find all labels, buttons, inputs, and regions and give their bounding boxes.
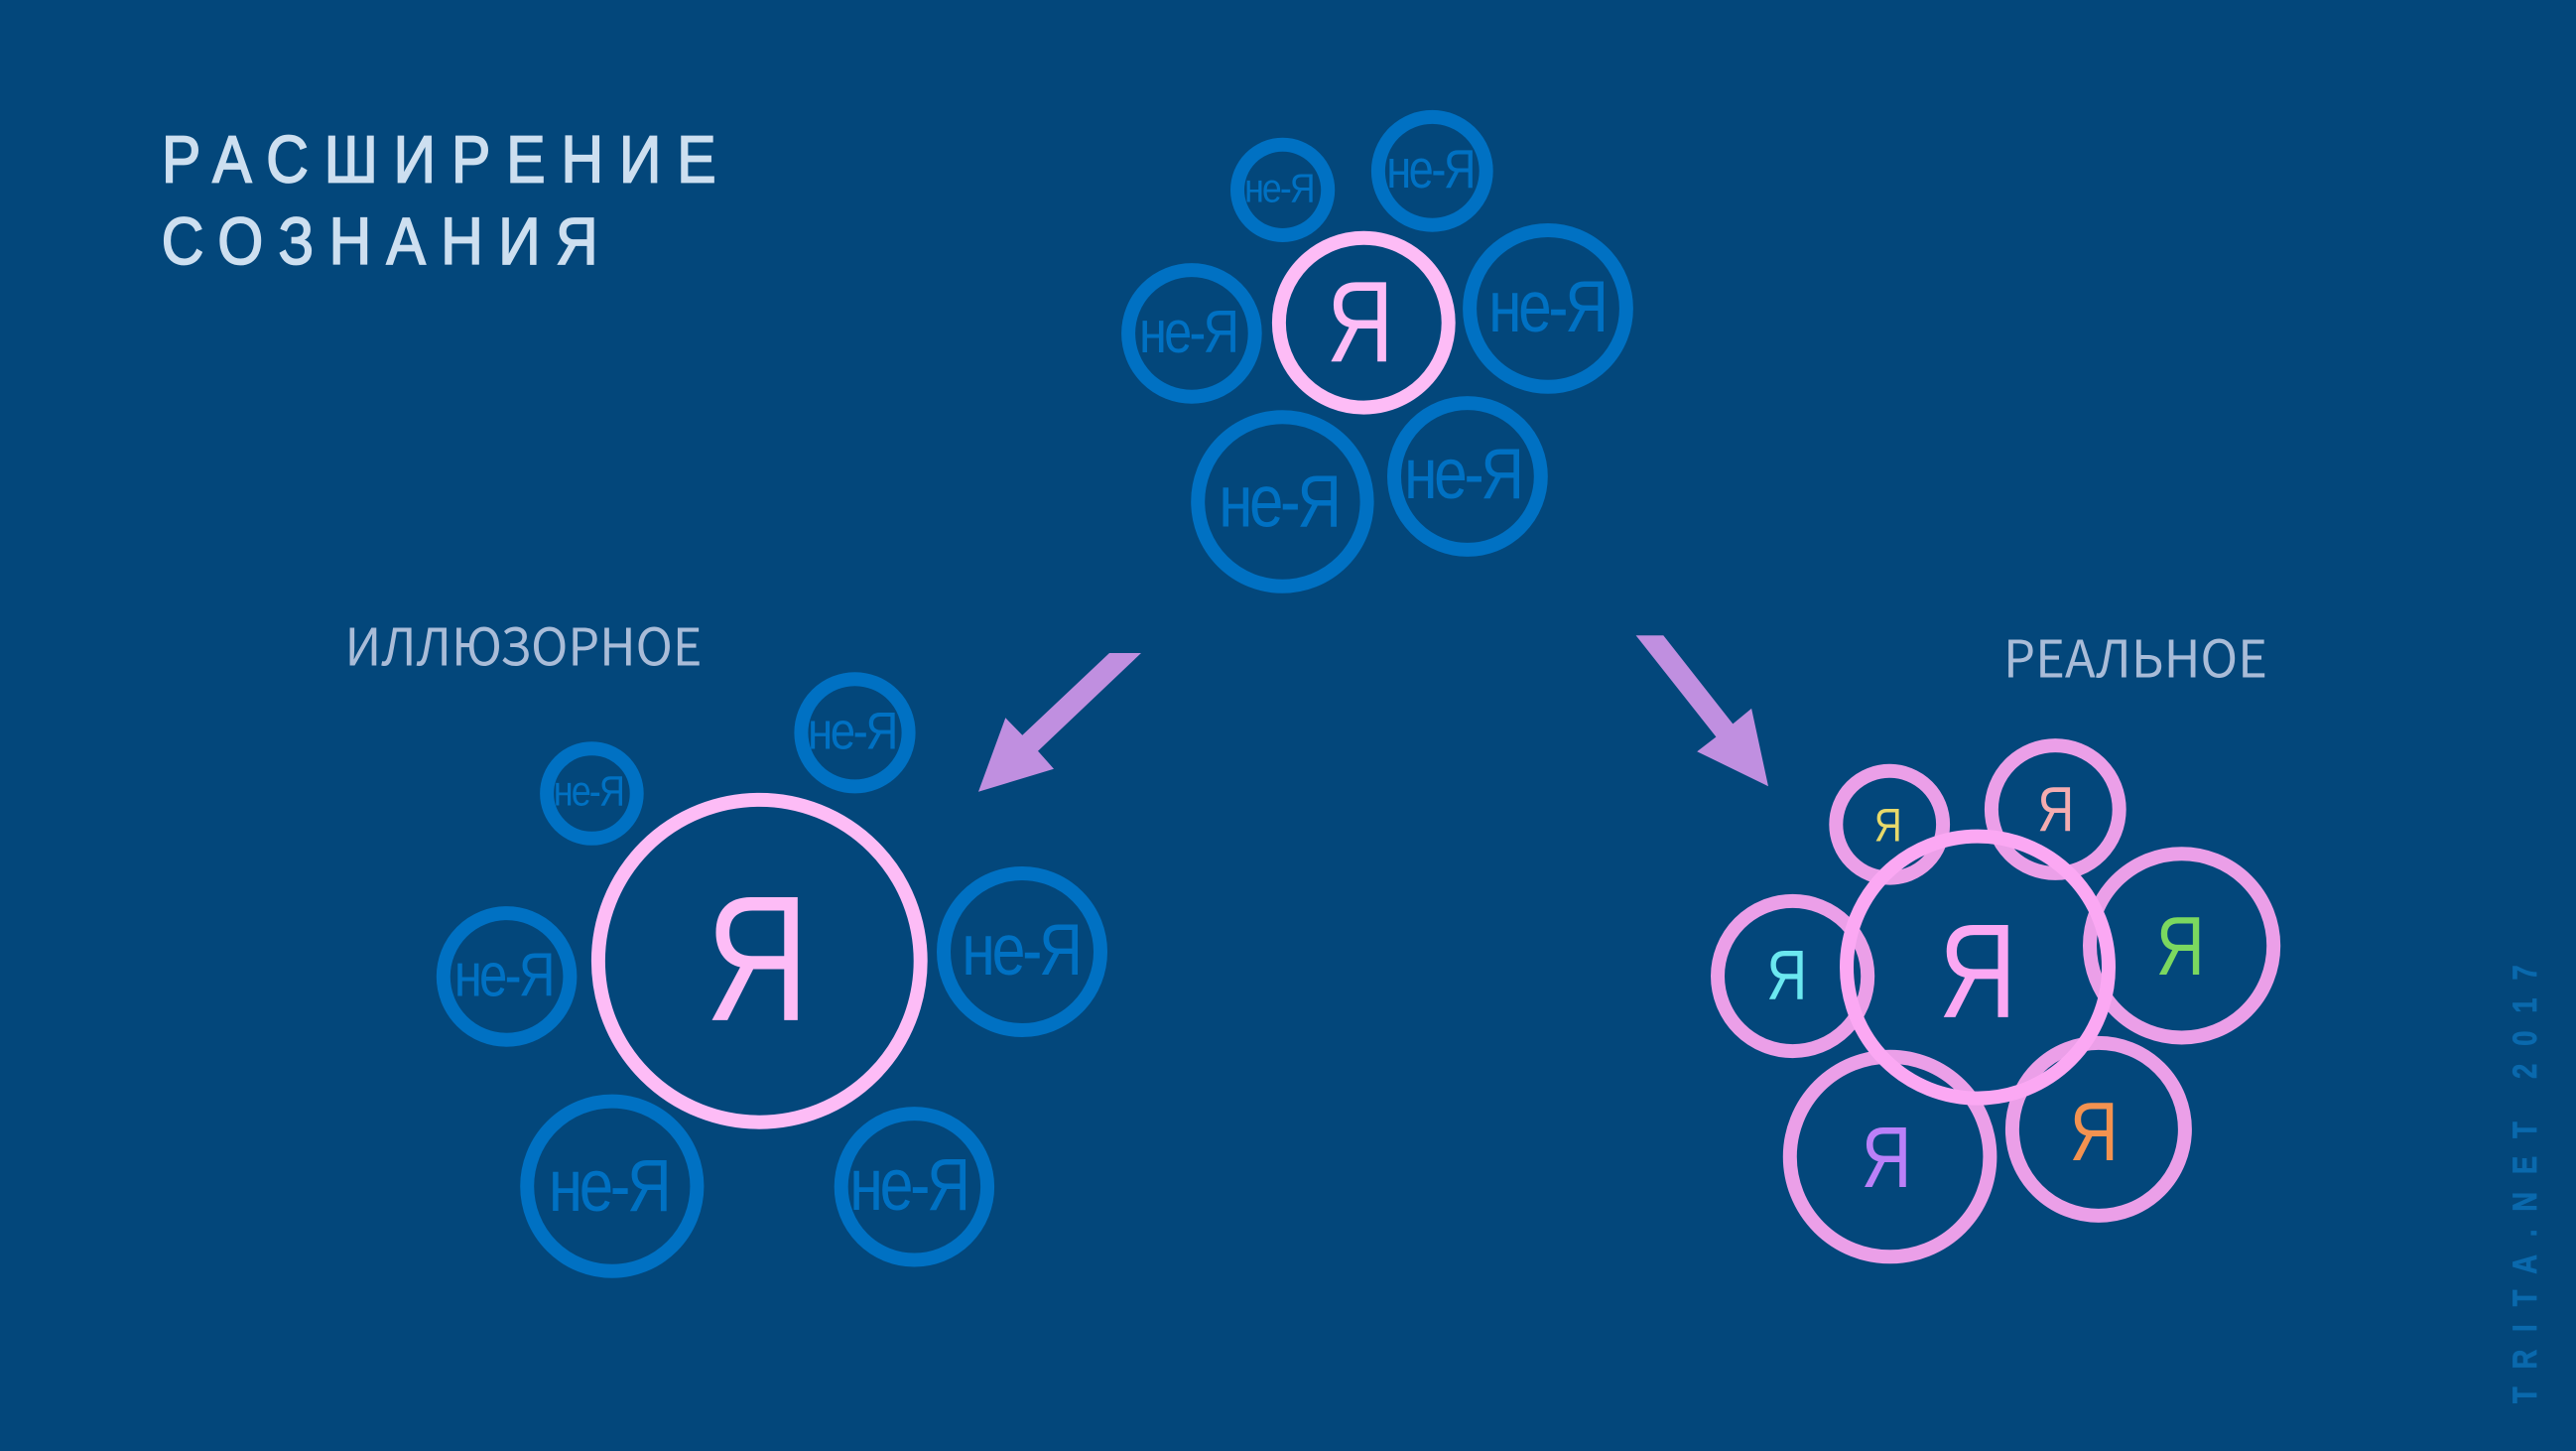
not-self circle 2 <box>1378 117 1486 225</box>
not-self circle 4: не-Я <box>1139 299 1236 365</box>
not-self circle 5 <box>1198 417 1367 587</box>
not-self circle 6: не-Я <box>1404 435 1521 514</box>
self circle green: Я <box>2156 899 2205 992</box>
self circle salmon: Я <box>2037 775 2074 846</box>
top cluster <box>1128 117 1626 587</box>
self circle yellow <box>1836 771 1943 878</box>
self circle orange: Я <box>2070 1085 2119 1178</box>
title: РАСШИРЕНИЕ <box>162 123 716 197</box>
not-self circle 4 <box>1128 270 1255 397</box>
not-self circle 6: не-Я <box>849 1143 967 1226</box>
arrow: to illusory <box>978 653 1141 792</box>
self circle yellow: Я <box>1874 799 1902 852</box>
not-self circle 1 <box>1237 145 1328 235</box>
self circle purple <box>1790 1057 1990 1256</box>
inflated self circle: Я <box>706 859 810 1059</box>
not-self circle 4: не-Я <box>962 909 1080 990</box>
central self circle <box>1847 837 2109 1099</box>
left cluster: illusory expansion <box>444 679 1100 1271</box>
self circle orange <box>2012 1043 2185 1216</box>
not-self circle 1: не-Я <box>1244 166 1314 211</box>
not-self circle 3 <box>444 913 570 1040</box>
self circle green <box>2090 854 2273 1038</box>
title: СОЗНАНИЯ <box>162 205 598 279</box>
self circle cyan <box>1718 901 1868 1051</box>
right cluster: real expansion <box>1718 745 2273 1256</box>
label: illusory: ИЛЛЮЗОРНОЕ <box>345 606 703 681</box>
not-self circle 6 <box>841 1114 987 1260</box>
not-self circle 1: не-Я <box>808 703 896 761</box>
not-self circle 2 <box>547 748 637 839</box>
not-self circle 3: не-Я <box>1488 267 1606 347</box>
not-self circle 2: не-Я <box>554 768 623 816</box>
not-self circle 3: не-Я <box>454 941 553 1010</box>
watermark: TRITA.NET 2017 <box>2506 965 2544 1403</box>
label: real: РЕАЛЬНОЕ <box>2003 617 2267 692</box>
self circle <box>1279 238 1449 408</box>
not-self circle 4 <box>944 873 1100 1030</box>
not-self circle 6 <box>1394 403 1541 550</box>
self circle salmon <box>1992 745 2120 873</box>
not-self circle 5 <box>527 1102 697 1271</box>
not-self circle 1 <box>801 679 909 786</box>
title <box>162 123 716 279</box>
self circle cyan: Я <box>1766 935 1807 1013</box>
not-self circle 3 <box>1470 230 1626 387</box>
not-self circle 2: не-Я <box>1386 139 1474 199</box>
arrow: to real <box>1636 635 1768 786</box>
inflated self circle <box>598 800 921 1122</box>
self circle: Я <box>1327 258 1393 386</box>
not-self circle 5: не-Я <box>549 1143 668 1227</box>
not-self circle 5: не-Я <box>1219 459 1339 542</box>
central self circle: Я <box>1939 896 2017 1046</box>
self circle purple: Я <box>1862 1110 1911 1206</box>
